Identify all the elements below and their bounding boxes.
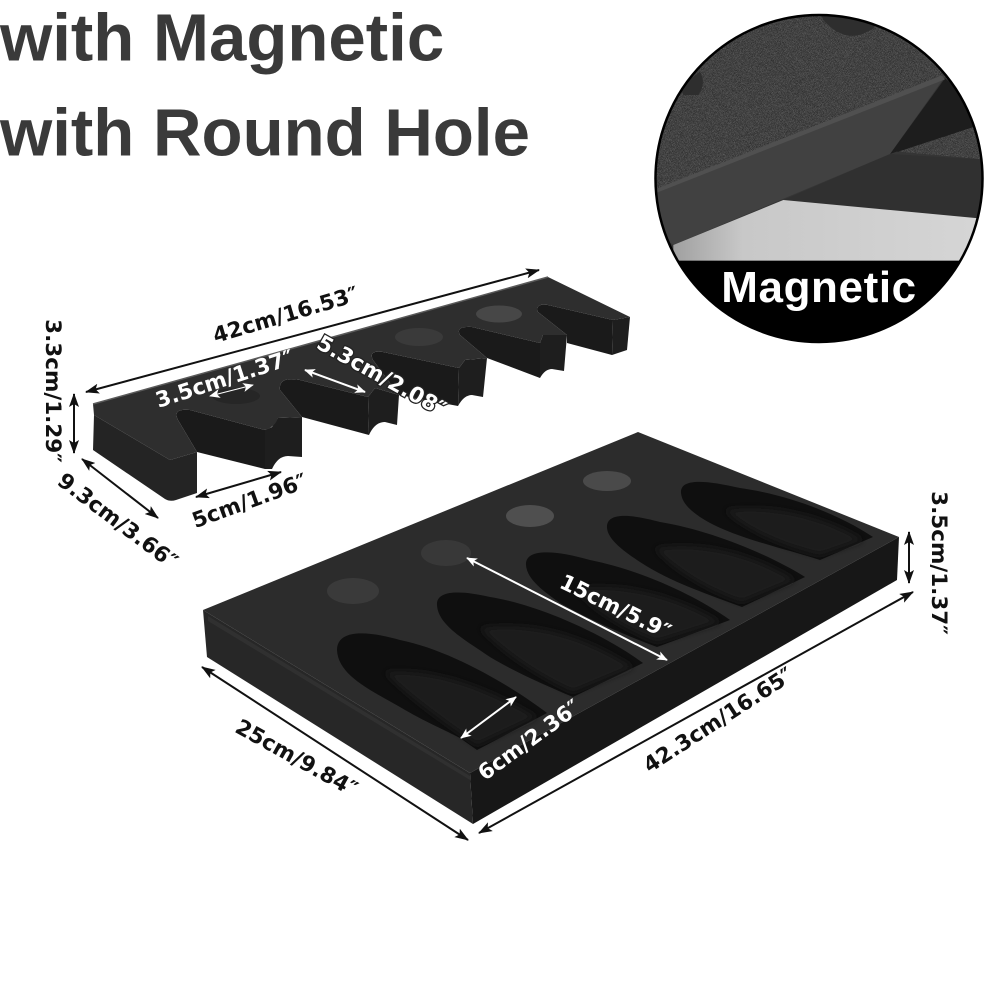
dimension: tray width: 25cm/9.84″ [231, 715, 362, 803]
dimension: tray length [479, 592, 913, 833]
product: fork-shaped rack [93, 277, 630, 501]
slot floor highlights [385, 508, 863, 745]
dimension: rack finger width: 5.3cm/2.08″ [312, 331, 451, 423]
dimension: rack notch width: 3.5cm/1.37″ [153, 345, 297, 414]
product: slotted base tray [203, 432, 899, 824]
dimension: rack height: 3.3cm/1.29″ [40, 319, 65, 463]
title [0, 0, 530, 171]
title: with Round Hole [0, 96, 530, 171]
title: with Magnetic [0, 0, 444, 76]
dimension: slot length [467, 558, 675, 660]
inset label: Magnetic [721, 263, 917, 312]
dimension: rack length [86, 270, 539, 392]
dimension: slot width: 6cm/2.36″ [474, 695, 586, 786]
dimension: slot length: 15cm/5.9″ [556, 570, 675, 645]
dimension: rack depth: 9.3cm/3.66″ [52, 468, 183, 575]
dimension: rack length: 42cm/16.53″ [210, 282, 362, 349]
dimension: tray width [202, 667, 468, 840]
inset circle: magnetic close-up [654, 14, 984, 344]
dimension: rack notch opening: 5cm/1.96″ [189, 469, 311, 534]
dimension: tray height: 3.5cm/1.37″ [926, 491, 951, 635]
slots [337, 482, 873, 750]
dimension: tray length: 42.3cm/16.65″ [639, 663, 799, 778]
